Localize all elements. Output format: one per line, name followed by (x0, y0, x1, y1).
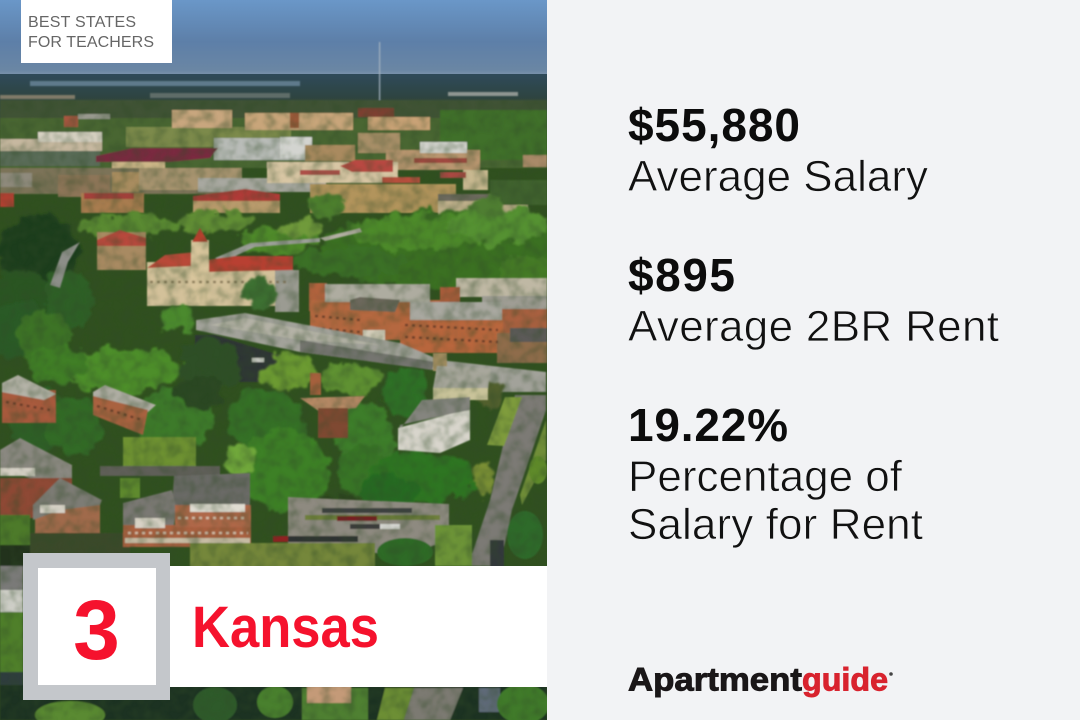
stat: percentage of salary: 19.22% (628, 399, 788, 451)
stat: average salary: $55,880 (628, 99, 800, 151)
stat: average salary (628, 99, 928, 201)
category text: FOR TEACHERS (28, 34, 154, 51)
stat: percentage of salary (628, 399, 923, 549)
lower foliage (0, 281, 502, 515)
trees mid-ground (0, 192, 547, 328)
stat: average salary: Average Salary (628, 152, 928, 201)
right background panel (547, 0, 1080, 720)
stat: average rent: Average 2BR Rent (628, 302, 999, 351)
lower buildings (0, 353, 549, 720)
state name: Kansas (192, 595, 379, 660)
brick complex (195, 278, 547, 392)
stat: percentage of salary: Percentage of (628, 452, 903, 501)
logo: Apartmentguide (628, 662, 893, 698)
category tag (21, 0, 172, 63)
rank number: 3 (73, 583, 120, 677)
aerial photo of campus (0, 0, 580, 720)
stat: average rent (628, 249, 999, 351)
stat: percentage of salary: Salary for Rent (628, 500, 923, 549)
rank and state banner (23, 553, 547, 700)
logo: Apartmentguide: guide (802, 662, 888, 698)
category text: BEST STATES (28, 14, 136, 31)
stat: average rent: $895 (628, 249, 735, 301)
logo: Apartmentguide: Apartment (628, 662, 802, 698)
